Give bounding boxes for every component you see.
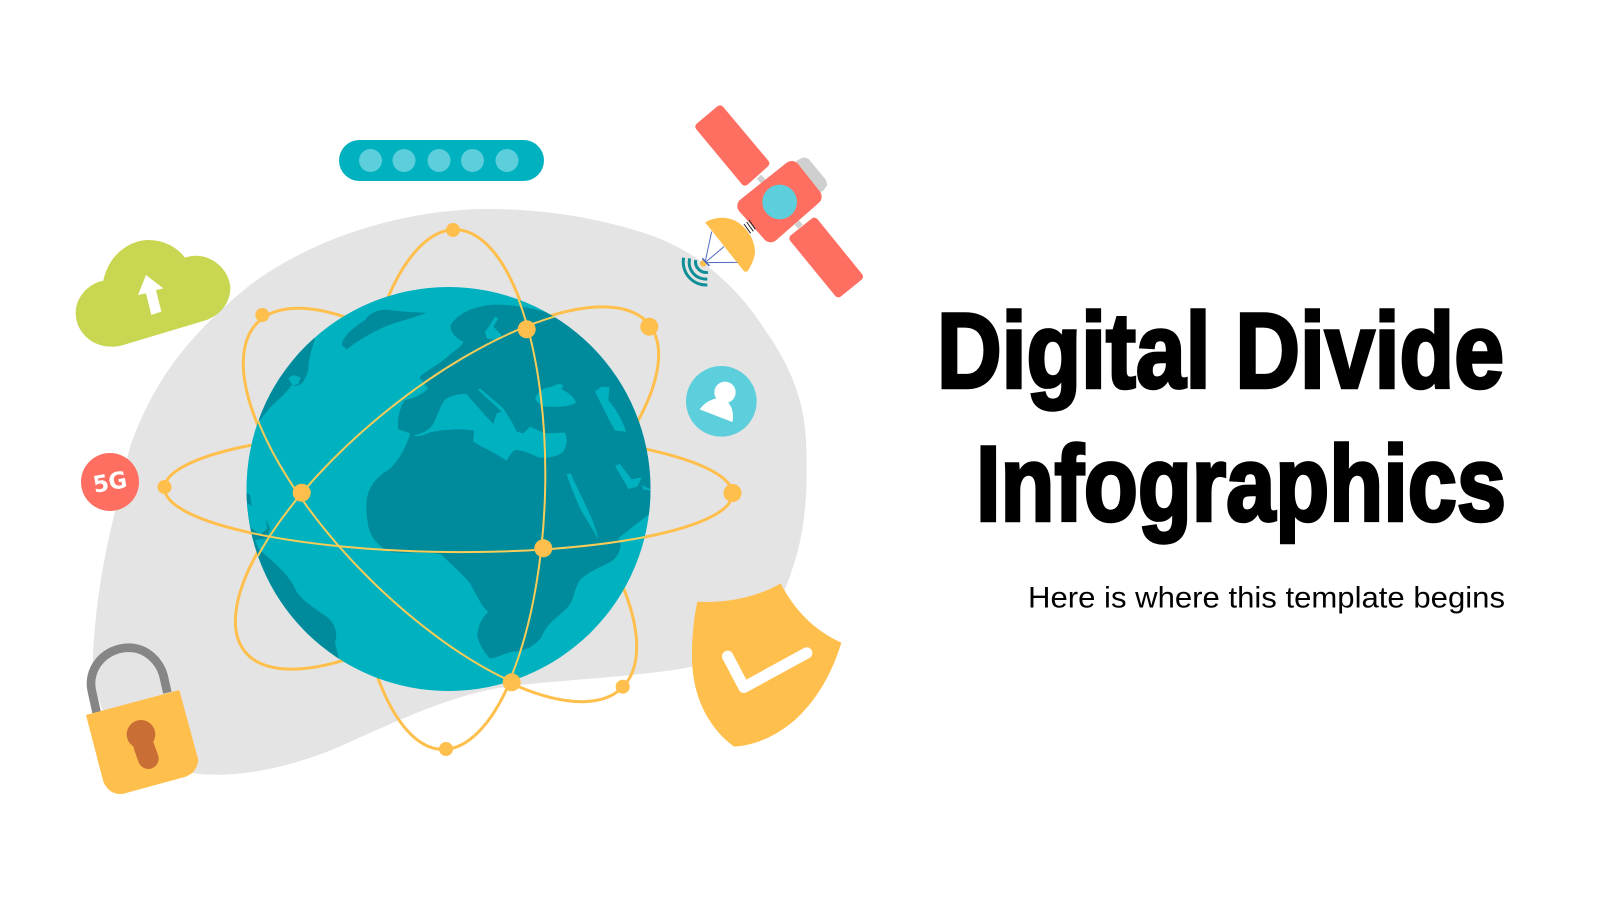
land: North America (258, 338, 315, 420)
globe (246, 287, 650, 691)
front orbit lines on globe (251, 299, 645, 679)
sea: Caspian (595, 387, 626, 432)
land: Greenland (342, 310, 427, 349)
land: Central and South America (246, 492, 339, 659)
title (937, 290, 1506, 543)
orbit rings behind globe (164, 227, 733, 761)
background blob (93, 209, 807, 775)
sea: Baltic (485, 317, 502, 340)
sea: Black Sea (535, 384, 576, 407)
land: Eurasia and Africa (366, 305, 663, 658)
icon: satellite (683, 109, 859, 293)
sea: Red Sea (567, 473, 598, 539)
icon: 5G badge (81, 453, 139, 511)
subtitle: Here is where this template begins (1028, 582, 1505, 615)
password pill (339, 140, 544, 181)
sea: Persian Gulf (615, 464, 651, 491)
title: Digital Divide (937, 290, 1504, 410)
title: Infographics (976, 423, 1506, 543)
orbit nodes (158, 223, 742, 756)
icon: 5G badge: 5G (91, 467, 129, 499)
icon: shield (692, 583, 841, 747)
icon: padlock (86, 648, 198, 794)
icon: user badge (686, 366, 757, 437)
sea: Mediterranean (413, 388, 567, 461)
icon: upload cloud (76, 240, 230, 347)
